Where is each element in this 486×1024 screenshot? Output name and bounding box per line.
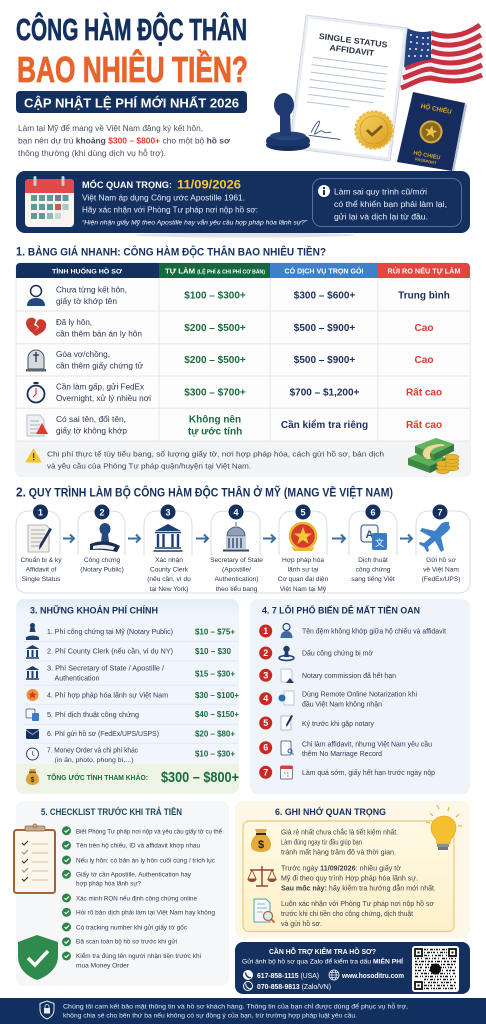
row 1: Trung bình: [398, 290, 450, 302]
mistake 5: [259, 715, 374, 730]
step 3: [147, 504, 191, 593]
row 5: Cần kiểm tra riêng: [281, 419, 368, 431]
row 3: $500 – $900+: [294, 355, 355, 366]
reminder texts: Làm đúng ngay từ đầu giúp bạn: [281, 838, 362, 846]
checklist items: Tên trên hộ chiếu, ID và affidavit khớp nhau: [76, 841, 200, 850]
fee 6: [26, 729, 235, 739]
heading: section 2: 2. QUY TRÌNH LÀM BỘ CÔNG HÀM ĐỘC THÂN Ở MỸ (MANG VỀ VIỆT NAM): [16, 484, 393, 500]
row 1: $300 – $600+: [294, 290, 355, 302]
fee 3: $15 – $30+: [195, 670, 235, 678]
fee 7: (in ấn, photo, phong bì,...): [54, 755, 134, 764]
step 5: Hợp pháp hóa: [282, 557, 324, 564]
reminder texts: Sau mốc này: hãy kiểm tra hướng dẫn mới nhất.: [281, 884, 436, 892]
row 3: cần thêm giấy chứng tử: [56, 362, 144, 370]
mistake 4: Dùng Remote Online Notarization khi: [302, 692, 417, 699]
fee 2: $10 – $30: [195, 647, 231, 656]
icon: affidavit document: AFFIDAVIT: [329, 43, 375, 58]
callout: warning: Làm sai quy trình cũ/mới: [334, 188, 427, 196]
mistake 5: Ký trước khi gặp notary: [302, 721, 374, 728]
reminder texts: Trước ngày 11/09/2026: nhiều giấy tờ: [281, 864, 401, 872]
step 2: 2: [99, 507, 105, 517]
panel: contact support: Gửi ảnh bộ hồ sơ qua Zalo để kiểm tra dấu MIỄN PHÍ: [242, 956, 404, 966]
mistake 2: Dấu công chứng bị mờ: [302, 648, 373, 658]
step 4: Secretary of State: [210, 557, 263, 564]
mistake 2: [259, 646, 373, 660]
heading: 4. 7 LỖI PHỔ BIẾN DỄ MẤT TIỀN OAN: [262, 605, 420, 617]
row 3: $200 – $500+: [184, 355, 246, 366]
mistake 4: 4: [263, 694, 268, 704]
fee 2: [26, 645, 231, 658]
intro text: [18, 123, 230, 158]
row 2: Đã ly hôn,: [56, 318, 92, 327]
mistake 7: Làm quá sớm, giấy hết hạn trước ngày nộp: [302, 768, 435, 777]
icon: phone USA: [243, 970, 253, 980]
table note: và yêu cầu của Phòng Tư pháp quận/huyện tại Việt Nam.: [47, 462, 251, 470]
step 6: 文: [375, 536, 384, 549]
mistake 6: thêm No Marriage Record: [302, 751, 382, 758]
price table: [16, 263, 470, 476]
step 4: Authentication): [214, 576, 258, 583]
reminder texts: Mỹ đi theo quy trình Hợp pháp hóa lãnh sự.: [281, 874, 418, 882]
step 4: theo tiểu bang: [216, 585, 258, 593]
icon: shield: [18, 935, 58, 980]
milestone text: “Hiện nhận giấy Mỹ theo Apostille hay vẫn yêu cầu hợp pháp hóa lãnh sự?”: [82, 218, 308, 226]
heading: 3. NHỮNG KHOẢN PHÍ CHÍNH: [30, 605, 158, 617]
fee 5: $40 – $150+: [195, 710, 239, 719]
step 6: công chứng: [356, 566, 391, 574]
step 5: lãnh sự tại: [288, 566, 319, 574]
step 3: 3: [165, 507, 171, 517]
step 1: Affidavit of: [26, 566, 56, 574]
mistake 3: Notary commission đã hết hạn: [302, 671, 396, 680]
step 3: (nếu cần, ví dụ: [147, 574, 191, 583]
title: [16, 11, 248, 90]
icon: affidavit document: [289, 15, 407, 161]
fee 5: 5. Phí dịch thuật công chứng: [47, 712, 139, 719]
reminder texts: Giá rẻ nhất chưa chắc là tiết kiệm nhất.: [281, 828, 398, 836]
checklist items: hợp pháp hóa lãnh sự?: [76, 881, 141, 888]
mistake 6: 6: [263, 743, 268, 753]
icon: light bulb: [426, 805, 462, 850]
table header: TÌNH HUỐNG HỒ SƠ: [52, 266, 122, 276]
mistake 2: 2: [263, 648, 268, 658]
fee 3: 3. Phí Secretary of State / Apostille /: [47, 666, 164, 673]
intro text: bạn nên dự trù khoảng $300 – $800+ cho một bộ hồ sơ: [18, 136, 230, 146]
fee 6: 6. Phí gửi hồ sơ (FedEx/UPS/USPS): [47, 729, 159, 738]
intro text: thông thường (khi dùng dịch vụ hỗ trợ).: [18, 148, 166, 158]
step 6: [351, 504, 395, 583]
icon: vietnamese passport: [397, 92, 467, 172]
mistake 7: [259, 766, 435, 779]
panel: section 6 key reminders: [235, 801, 470, 938]
reminder card: [243, 821, 454, 932]
row 4: Rất cao: [406, 386, 442, 398]
fee 2: 2. Phí County Clerk (nếu cần, ví dụ NY): [47, 647, 173, 656]
fee 3: [26, 666, 235, 682]
checklist items: Giấy tờ cần Apostille, Authentication hay: [76, 870, 192, 879]
milestone text: Hãy xác nhận với Phòng Tư pháp nơi nộp hồ sơ:: [82, 206, 258, 215]
row 2: cần thêm bản án ly hôn: [56, 330, 142, 338]
row 5: Có sai tên, đổi tên,: [56, 415, 126, 424]
intro text: Làm tại Mỹ để mang về Việt Nam đăng ký kết hôn,: [18, 123, 203, 133]
row 5: Không nên: [189, 414, 241, 426]
step 2: (Notary Public): [80, 566, 124, 574]
panel: contact support: 617-858-1115 (USA): [257, 973, 319, 980]
icon: calendar: [25, 176, 74, 227]
step 1: 1: [38, 507, 43, 517]
step 5: Cơ quan đại diện: [278, 576, 329, 583]
row 1: Chưa từng kết hôn,: [56, 286, 127, 294]
step 1: Chuẩn bị & ký: [20, 556, 62, 564]
callout: warning: có thể khiến bạn phải làm lại,: [334, 200, 447, 209]
callout: warning: [312, 178, 462, 226]
step 6: A: [366, 529, 374, 541]
step 7: (FedEx/UPS): [422, 576, 460, 583]
checklist items: Nếu ly hôn: có bản án ly hôn cuối cùng / trích lục: [76, 855, 216, 864]
illustration: flag, affidavit, stamp, passport: [266, 15, 483, 172]
checklist items: Kiểm tra đúng tên người nhận tiền trước khi: [76, 951, 201, 960]
total estimate: $300 – $800+: [161, 769, 239, 786]
step 7: 7: [437, 507, 443, 517]
row 4: $700 – $1,200+: [290, 388, 360, 398]
row 2: [26, 318, 433, 338]
QR code: [412, 946, 459, 992]
reminder texts: Luôn xác nhận với Phòng Tư pháp nơi nộp hồ sơ: [281, 899, 434, 908]
row 4: [28, 382, 442, 403]
arrows between steps: [63, 534, 412, 542]
checklist items: Có tracking number khi gửi giấy tờ gốc: [76, 922, 188, 931]
row 1: [27, 286, 450, 306]
icon: rubber stamp: [266, 93, 310, 151]
step 7: [419, 504, 460, 583]
checklist items: Hỏi rõ bản dịch phải làm tại Việt Nam hay không: [76, 909, 215, 917]
panel: contact support: 070-858-9813 (Zalo/VN): [257, 984, 331, 991]
reminder texts: [281, 828, 436, 928]
step 5: 5: [300, 507, 306, 517]
step 6: 6: [370, 507, 376, 517]
fee 1: $10 – $75+: [195, 628, 235, 636]
total estimate: [16, 764, 239, 794]
icon: scales: [248, 866, 276, 886]
step 6: sang tiếng Việt: [351, 574, 395, 583]
row 5: tự ước tính: [188, 426, 242, 438]
mistake 3: 3: [263, 670, 268, 680]
table header: TỰ LÀM (LỆ PHÍ & CHI PHÍ CƠ BẢN): [165, 266, 265, 276]
step 1: Single Status: [22, 576, 61, 583]
checklist items: Biết Phòng Tư pháp nơi nộp và yêu cầu giấy tờ cụ thể: [76, 826, 222, 835]
step 2: [80, 504, 124, 574]
total estimate: $: [31, 777, 35, 784]
icon: phone Zalo: [244, 982, 252, 990]
fee 4: $30 – $100+: [195, 691, 239, 700]
table header: CÓ DỊCH VỤ TRỌN GÓI: [284, 266, 364, 276]
fee 4: [26, 689, 239, 701]
fee 5: [26, 709, 239, 721]
mistake 1: Tên đệm không khớp giữa hộ chiếu và affidavit: [302, 626, 446, 636]
icon: american flag: [401, 23, 483, 91]
fee 1: [26, 623, 235, 640]
mistake 5: 5: [263, 718, 268, 728]
fee 1: 1. Phí công chứng tại Mỹ (Notary Public): [47, 629, 173, 636]
step 6: Dịch thuật: [358, 557, 388, 564]
row 2: $200 – $500+: [184, 323, 246, 334]
subtitle bar: [16, 91, 247, 113]
table note: Chi phí thực tế tùy tiểu bang, số lượng giấy tờ, nơi hợp pháp hóa, cách gửi hồ sơ, bản dịch: [47, 450, 384, 459]
row 5: [27, 414, 442, 438]
fee 6: $20 – $80+: [195, 730, 235, 738]
step 1: [20, 504, 62, 583]
reminder texts: trước khi chi tiền cho công chứng, dịch thuật: [281, 909, 413, 918]
fee 4: 4. Phí hợp pháp hóa lãnh sự Việt Nam: [47, 692, 168, 700]
icon: clipboard: [14, 824, 55, 893]
table header: RỦI RO NẾU TỰ LÀM: [388, 266, 461, 276]
icon: money bag: [251, 829, 271, 852]
row 4: Overnight, xử lý nhiều nơi: [56, 394, 151, 403]
step 3: County Clerk: [150, 566, 189, 574]
mistake 6: [259, 740, 432, 758]
row 2: Cao: [415, 323, 433, 334]
row 3: Cao: [415, 355, 433, 366]
footer: privacy note: Chúng tôi cam kết bảo mật thông tin và hồ sơ khách hàng. Thông tin của bạn chỉ được dùng để phục vụ hỗ trợ,: [63, 1002, 408, 1010]
mistake 4: [259, 691, 417, 708]
icon: vietnamese passport: HỘ CHIẾU: [420, 100, 453, 116]
icon: globe: [329, 970, 339, 980]
title: BAO NHIÊU TIỀN?: [17, 48, 248, 90]
checklist items: [62, 826, 222, 970]
panel: section 3 main fees: [16, 599, 239, 794]
milestone text: 11/09/2026: [177, 180, 241, 192]
heading: 6. GHI NHỚ QUAN TRỌNG: [275, 806, 386, 817]
mistake 6: Chỉ làm affidavit, nhưng Việt Nam yêu cầu: [302, 740, 432, 748]
total estimate: TỔNG ƯỚC TÍNH THAM KHẢO:: [47, 773, 148, 782]
icon: gold seal: [356, 112, 392, 148]
step 4: (Apostille/: [222, 566, 251, 574]
icon: shield lock: [40, 1001, 54, 1019]
mistake 4: đầu Việt Nam không nhận: [302, 699, 382, 708]
banner: important milestone: [16, 171, 470, 238]
icon: affidavit document: SINGLE STATUS: [318, 32, 388, 50]
step 5: Việt Nam tại Mỹ: [280, 586, 327, 593]
mistake 1: [259, 624, 446, 638]
icon: vietnamese passport: HỘ CHIẾU: [413, 148, 441, 162]
fee 3: Authentication: [54, 675, 100, 682]
step 4: 4: [233, 507, 239, 517]
process flow: [16, 504, 470, 593]
fee 7: [26, 748, 235, 764]
checklist items: Đã scan toàn bộ hồ sơ trước khi gửi: [76, 937, 177, 946]
title: CÔNG HÀM ĐỘC THÂN: [16, 11, 247, 47]
icon: vietnamese passport: PASSPORT: [415, 156, 437, 166]
row 1: $100 – $300+: [184, 290, 246, 302]
row 3: Góa vợ/chồng,: [56, 350, 110, 359]
icon: document with magnifier: [254, 899, 274, 922]
step 2: Công chứng: [84, 557, 120, 564]
icon: money and coins: [408, 438, 459, 474]
fee 7: 7. Money Order và chi phí khác: [47, 748, 138, 754]
reminder texts: và gửi hồ sơ.: [281, 919, 322, 928]
checklist items: mua Money Order: [76, 962, 130, 970]
step 7: Gửi hồ sơ: [426, 555, 456, 564]
subtitle bar: CẬP NHẬT LỆ PHÍ MỚI NHẤT 2026: [24, 96, 239, 110]
step 3: tại New York): [150, 586, 188, 593]
reminder texts: tránh mất hàng trăm đô và thời gian.: [281, 848, 396, 856]
footer: privacy note: không chia sẻ cho bên thứ ba nếu không có sự đồng ý của bạn, trừ trường hợp pháp luật yêu cầu.: [63, 1010, 357, 1020]
mistake 7: 7: [263, 767, 268, 777]
footer: privacy note: [0, 998, 486, 1024]
fee 7: $10 – $30+: [195, 750, 235, 758]
panel: section 4 common mistakes: [250, 599, 470, 794]
checklist items: Xác minh RON nếu định công chứng online: [76, 893, 197, 902]
row 4: Cần làm gấp, gửi FedEx: [56, 383, 144, 392]
heading: 5. CHECKLIST TRƯỚC KHI TRẢ TIỀN: [41, 806, 182, 817]
milestone text: Việt Nam áp dụng Công ước Apostille 1961.: [82, 194, 245, 202]
mistake 3: [259, 669, 396, 683]
panel: contact support: [235, 942, 470, 994]
row 3: [26, 350, 433, 372]
row 2: $500 – $900+: [294, 323, 355, 334]
table header: [16, 263, 470, 278]
panel: contact support: www.hosoditru.com: [341, 973, 404, 980]
heading: section 1: 1. BẢNG GIÁ NHANH: CÔNG HÀM ĐỘC THÂN BAO NHIÊU TIỀN?: [16, 244, 326, 258]
step 7: về Việt Nam: [423, 564, 459, 574]
callout: warning: gửi lại và dịch lại từ đầu.: [334, 212, 428, 222]
row 5: giấy tờ không khớp: [56, 426, 128, 436]
milestone text: [82, 179, 308, 226]
step 4: [210, 504, 263, 593]
icon: money bag: $: [258, 839, 264, 851]
panel: contact support: CẦN HỖ TRỢ KIỂM TRA HỒ SƠ?: [269, 946, 376, 956]
row 4: $300 – $700+: [184, 388, 246, 398]
table note: [26, 449, 384, 470]
panel: section 5 checklist: [14, 801, 229, 986]
row 1: giấy tờ khớp tên: [56, 297, 117, 306]
milestone text: MỐC QUAN TRỌNG:: [82, 179, 172, 191]
mistake 1: 1: [263, 626, 268, 636]
step 5: [278, 504, 329, 593]
row 5: Rất cao: [406, 419, 442, 431]
step 3: Xác nhận: [155, 557, 183, 564]
